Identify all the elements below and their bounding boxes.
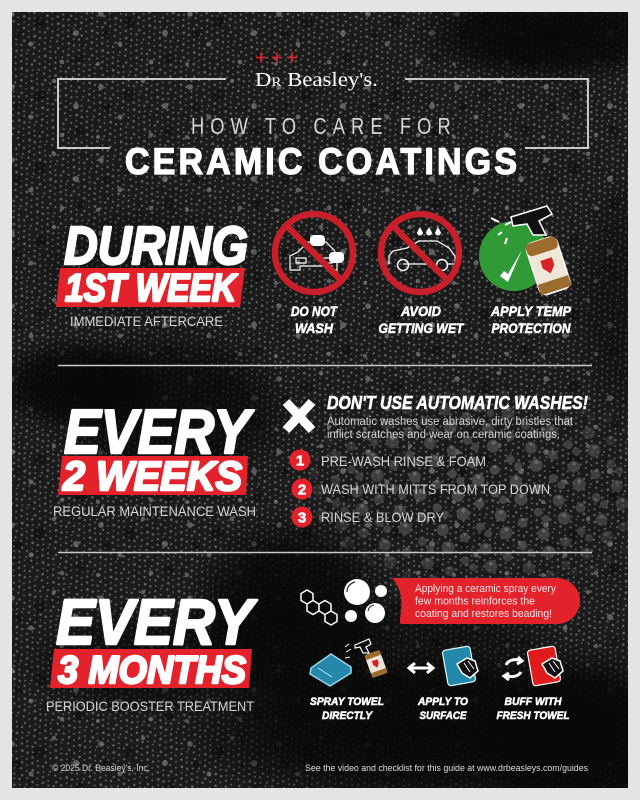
panel: every 3 months [46, 578, 580, 722]
warning description: Automatic washes use abrasive, dirty bristles that [327, 416, 574, 428]
title frame [58, 79, 588, 148]
label: apply temp protection: APPLY TEMP [490, 303, 572, 319]
logo [255, 52, 378, 91]
step 3 [292, 506, 445, 528]
step 2: WASH WITH MITTS FROM TOP DOWN [321, 481, 550, 497]
heading: during: DURING [64, 216, 248, 276]
icon: hexagon molecule [301, 590, 337, 625]
banner: 3 months: 3 MONTHS [58, 649, 246, 692]
subheading: IMMEDIATE AFTERCARE [70, 314, 223, 329]
label: avoid getting wet: AVOID [400, 303, 441, 319]
label: buff with fresh towel: BUFF WITH [504, 696, 562, 708]
step 2: 2 [298, 482, 306, 498]
label: apply to surface: APPLY TO [417, 696, 468, 708]
footer link: See the video and checklist for this guide at www.drbeasleys.com/guides [305, 763, 588, 773]
icon: refresh arrows [504, 657, 522, 680]
label: apply temp protection: PROTECTION [492, 320, 571, 336]
logo: DR Beasley's. [255, 69, 378, 91]
label: apply to surface: SURFACE [420, 710, 467, 722]
icon: red crosses [256, 52, 297, 62]
warning description [327, 416, 574, 441]
label: avoid getting wet: GETTING WET [378, 320, 465, 336]
icon: blue cloth with hand [442, 646, 478, 686]
label: apply temp protection [490, 303, 572, 336]
label: spray towel directly [310, 696, 384, 722]
label: apply to surface [417, 696, 468, 722]
label: do not wash: WASH [295, 320, 334, 336]
label: do not wash: DO NOT [291, 303, 338, 319]
warning description: inflict scratches and wear on ceramic coatings. [327, 429, 560, 441]
step 3: 3 [298, 510, 306, 526]
step 2 [292, 478, 550, 500]
label: buff with fresh towel [496, 696, 570, 722]
title line 2: CERAMIC COATINGS [125, 141, 517, 182]
label: avoid getting wet [378, 303, 465, 336]
footer copyright: © 2025 Dr. Beasley's, Inc. [52, 763, 150, 773]
step 1: PRE-WASH RINSE & FOAM [321, 453, 486, 469]
icon: double arrow [409, 663, 433, 673]
icon: red cloth with hand [527, 646, 563, 686]
callout: coating and restores beading! [415, 608, 552, 620]
subheading: PERIODIC BOOSTER TREATMENT [46, 698, 254, 714]
label: spray towel directly: DIRECTLY [322, 710, 374, 722]
panel: every 2 weeks [53, 393, 588, 528]
banner: 1st week: 1ST WEEK [65, 267, 238, 310]
icon: towel with spray [310, 639, 388, 686]
subheading: REGULAR MAINTENANCE WASH [53, 504, 256, 519]
step 3: RINSE & BLOW DRY [321, 509, 445, 525]
icon: spray bottle on green circle [479, 206, 572, 296]
icon: white x [286, 402, 312, 430]
panel: during first week [56, 206, 572, 336]
icon: no wash [275, 214, 353, 292]
label: do not wash [291, 303, 338, 336]
heading: every: EVERY [56, 586, 258, 658]
icon: avoid getting wet [381, 214, 459, 292]
heading: every: EVERY [64, 398, 255, 467]
warning heading: DON'T USE AUTOMATIC WASHES! [327, 393, 588, 413]
title line 1: HOW TO CARE FOR [191, 114, 451, 140]
callout: Applying a ceramic spray every [415, 583, 557, 595]
step 1 [290, 450, 486, 470]
icon: water beads [344, 579, 387, 623]
label: buff with fresh towel: FRESH TOWEL [496, 710, 570, 722]
step 1: 1 [296, 452, 304, 470]
callout [392, 578, 580, 624]
label: spray towel directly: SPRAY TOWEL [310, 696, 384, 708]
banner: 2 weeks: 2 WEEKS [62, 453, 242, 499]
callout: few months reinforces the [415, 596, 535, 608]
